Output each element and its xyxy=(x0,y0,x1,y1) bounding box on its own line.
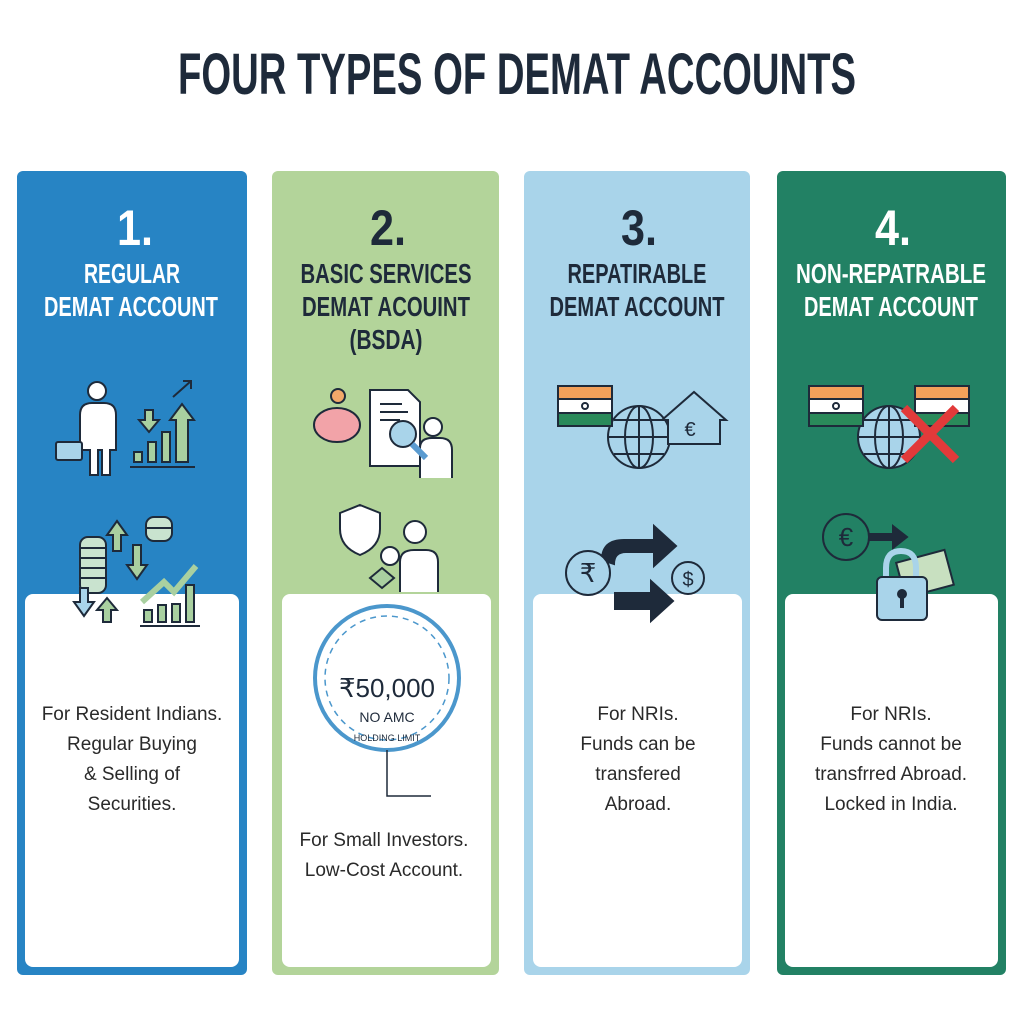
callout: holding limit circle: NO AMC xyxy=(359,709,415,725)
text box: non-repatriable xyxy=(785,594,998,967)
text box: repatriable: transfered xyxy=(595,764,681,785)
text box: bsda: Low-Cost Account. xyxy=(305,860,463,881)
text box: repatriable: Abroad. xyxy=(605,794,671,815)
panel: non-repatriable demat account xyxy=(777,171,1006,975)
text box: non-repatriable: Funds cannot be xyxy=(820,734,962,755)
text box: bsda xyxy=(282,594,491,967)
heading: 2 bsda xyxy=(300,200,472,355)
icon: currency transfer arrows: $ xyxy=(682,569,694,591)
heading: 3 repatriable xyxy=(550,200,724,322)
icon: flag globe house: € xyxy=(684,419,696,441)
heading: 2 bsda: (BSDA) xyxy=(350,324,422,355)
text box: regular: Securities. xyxy=(88,794,176,815)
heading: 2 bsda: DEMAT ACOUINT xyxy=(302,291,470,322)
heading: 1 regular: REGULAR xyxy=(84,258,180,289)
icon: investor with chart xyxy=(56,381,195,475)
icon: euro lock cash xyxy=(823,514,954,620)
text box: regular: Regular Buying xyxy=(67,734,197,755)
icon: euro lock cash: € xyxy=(839,522,854,552)
heading: 2 bsda: BASIC SERVICES xyxy=(300,258,472,289)
panel: basic services demat account xyxy=(272,171,499,975)
text box: repatriable: For NRIs. xyxy=(597,704,679,725)
icon: flags globe cross xyxy=(809,386,969,468)
icon: currency transfer arrows xyxy=(566,526,704,621)
panel: regular demat account xyxy=(17,171,247,975)
heading: 3 repatriable: 3. xyxy=(621,200,657,256)
text box: bsda: For Small Investors. xyxy=(300,830,468,851)
callout: holding limit circle: HOLDING LIMIT xyxy=(354,733,421,743)
icon: flag globe house xyxy=(558,386,726,468)
callout: holding limit circle: ₹50,000 xyxy=(339,673,435,703)
text box: regular: For Resident Indians. xyxy=(42,704,222,725)
heading: 4 non-repatriable: 4. xyxy=(875,200,911,256)
text box: non-repatriable: Locked in India. xyxy=(824,794,958,815)
text box: repatriable: Funds can be xyxy=(580,734,696,755)
icon: coins and trend xyxy=(74,517,200,626)
heading: 3 repatriable: REPATIRABLE xyxy=(568,258,706,289)
icon: piggy bank and document search xyxy=(314,389,452,478)
text box: regular xyxy=(25,594,239,967)
heading: 1 regular: DEMAT ACCOUNT xyxy=(44,291,218,322)
icon: shield and people xyxy=(340,505,438,592)
heading: 3 repatriable: DEMAT ACCOUNT xyxy=(550,291,724,322)
heading: 1 regular: 1. xyxy=(117,200,153,256)
text box: regular: & Selling of xyxy=(84,764,181,785)
text box: non-repatriable: transfrred Abroad. xyxy=(815,764,967,785)
heading: 1 regular xyxy=(44,200,218,322)
panel: repatriable demat account xyxy=(524,171,750,975)
text box: repatriable xyxy=(533,594,742,967)
heading: 4 non-repatriable xyxy=(796,200,986,322)
callout: holding limit circle xyxy=(315,606,459,796)
text box: non-repatriable: For NRIs. xyxy=(850,704,932,725)
heading: 2 bsda: 2. xyxy=(370,200,406,256)
icon: currency transfer arrows: ₹ xyxy=(580,558,596,588)
